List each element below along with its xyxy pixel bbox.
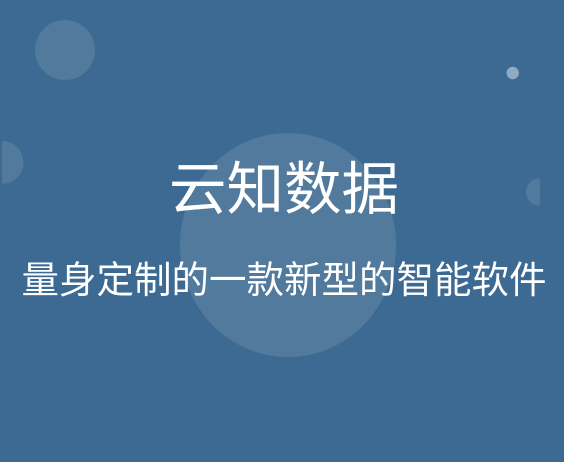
- half circle: right edge: [526, 178, 540, 206]
- large center circle: [180, 133, 396, 357]
- small dot: top right: [506, 67, 519, 79]
- subtitle: 量身定制的一款新型的智能软件: [22, 259, 546, 301]
- title: 云知数据: [169, 158, 399, 222]
- half circle: left edge: [2, 141, 24, 184]
- circle: top left: [35, 20, 95, 80]
